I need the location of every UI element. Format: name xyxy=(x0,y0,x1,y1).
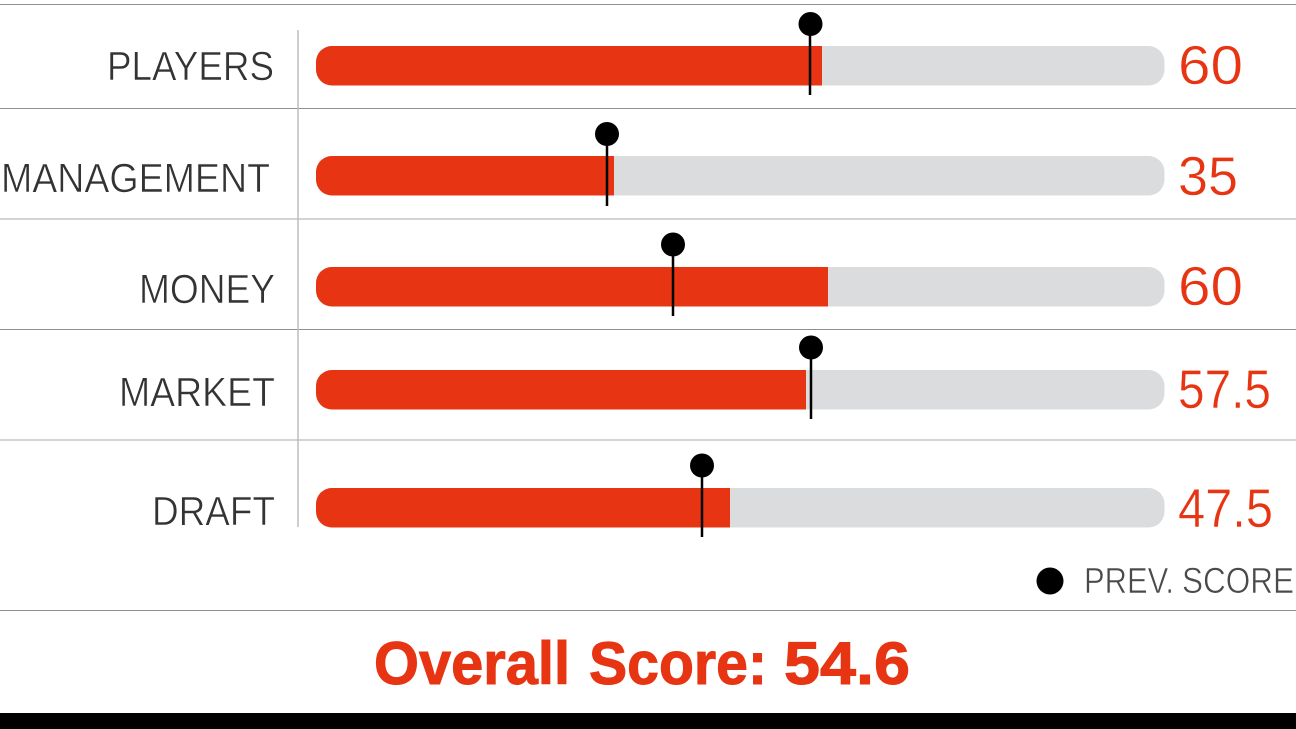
row: players: 60 xyxy=(1178,34,1243,96)
row: market: 57.5 xyxy=(1178,358,1271,420)
overall score: Overall xyxy=(374,630,570,697)
row: money: MONEY xyxy=(139,266,275,312)
row: management: 35 xyxy=(1178,145,1238,207)
row: management xyxy=(1,122,1238,207)
row: draft xyxy=(152,454,1273,539)
overall score: Score: xyxy=(589,630,767,697)
row: players: PLAYERS xyxy=(107,43,274,89)
bottom black band xyxy=(0,713,1296,729)
overall score xyxy=(374,630,910,697)
row: players xyxy=(107,12,1243,96)
row: management: MANAGEMENT xyxy=(1,155,270,201)
legend: previous score: PREV. xyxy=(1084,560,1174,601)
legend: previous score xyxy=(1036,560,1294,601)
row: draft: DRAFT xyxy=(152,488,275,534)
row: market xyxy=(119,336,1271,420)
row: money xyxy=(139,232,1243,317)
row: draft: 47.5 xyxy=(1178,477,1273,539)
overall score: 54.6 xyxy=(784,630,910,697)
row: money: 60 xyxy=(1178,255,1243,317)
row: market: MARKET xyxy=(119,369,275,415)
